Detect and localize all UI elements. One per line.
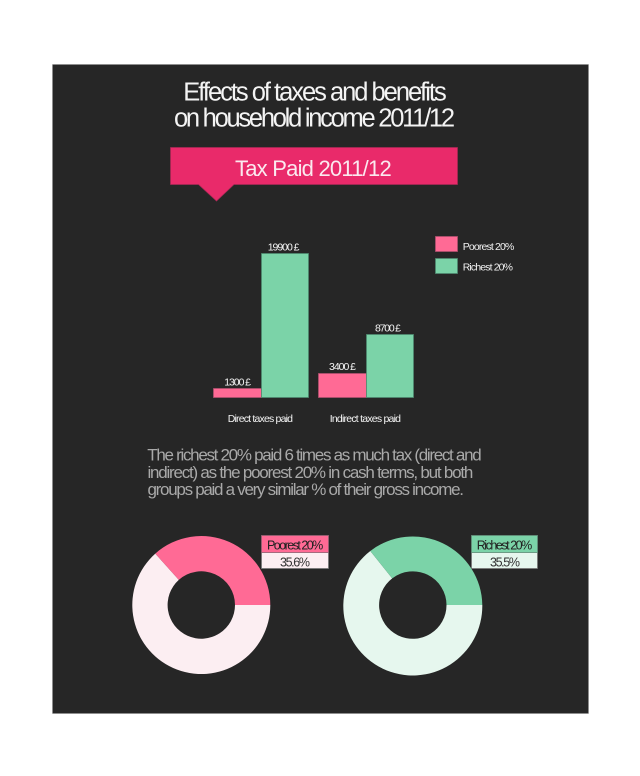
legend: Poorest 20% — [463, 241, 514, 253]
category axis labels — [228, 413, 401, 425]
text block: summary: indirect) as the poorest 20% in cash terms, but both — [148, 463, 473, 482]
donut chart: richest 20% — [343, 536, 482, 675]
bar value labels: 3400 £ — [329, 361, 356, 373]
title: on household income 2011/12 — [174, 104, 455, 132]
text block: summary — [147, 446, 482, 499]
text block: summary: The richest 20% paid 6 times as much tax (direct and — [147, 446, 482, 464]
bar value labels: 19900 £ — [268, 242, 300, 254]
label: poorest 20% value: 35.6% — [280, 556, 310, 570]
bar chart: tax paid — [214, 242, 414, 425]
label: richest 20% value: Richest 20% — [477, 538, 532, 552]
label: poorest 20% value — [262, 536, 328, 570]
banner: Tax Paid 2011/12 — [170, 148, 458, 201]
panel: dark background — [52, 64, 588, 714]
bar value labels: 8700 £ — [375, 322, 401, 334]
category axis labels: Indirect taxes paid — [330, 413, 401, 425]
bar value labels — [224, 242, 401, 388]
banner: Tax Paid 2011/12: Tax Paid 2011/12 — [235, 156, 392, 181]
title: Effects of taxes and benefits — [183, 78, 447, 106]
label: richest 20% value — [472, 536, 538, 570]
legend: Richest 20% — [463, 262, 513, 274]
bars: direct taxes paid — [214, 254, 308, 398]
donut chart: poorest 20% — [132, 536, 270, 674]
label: poorest 20% value: Poorest 20% — [267, 538, 323, 552]
legend — [436, 236, 514, 274]
bar value labels: 1300 £ — [224, 376, 251, 388]
text block: summary: groups paid a very similar % of their gross income. — [148, 480, 464, 499]
label: richest 20% value: 35.5% — [490, 556, 520, 570]
title — [174, 78, 455, 132]
bars: indirect taxes paid — [318, 334, 414, 398]
category axis labels: Direct taxes paid — [228, 413, 293, 425]
